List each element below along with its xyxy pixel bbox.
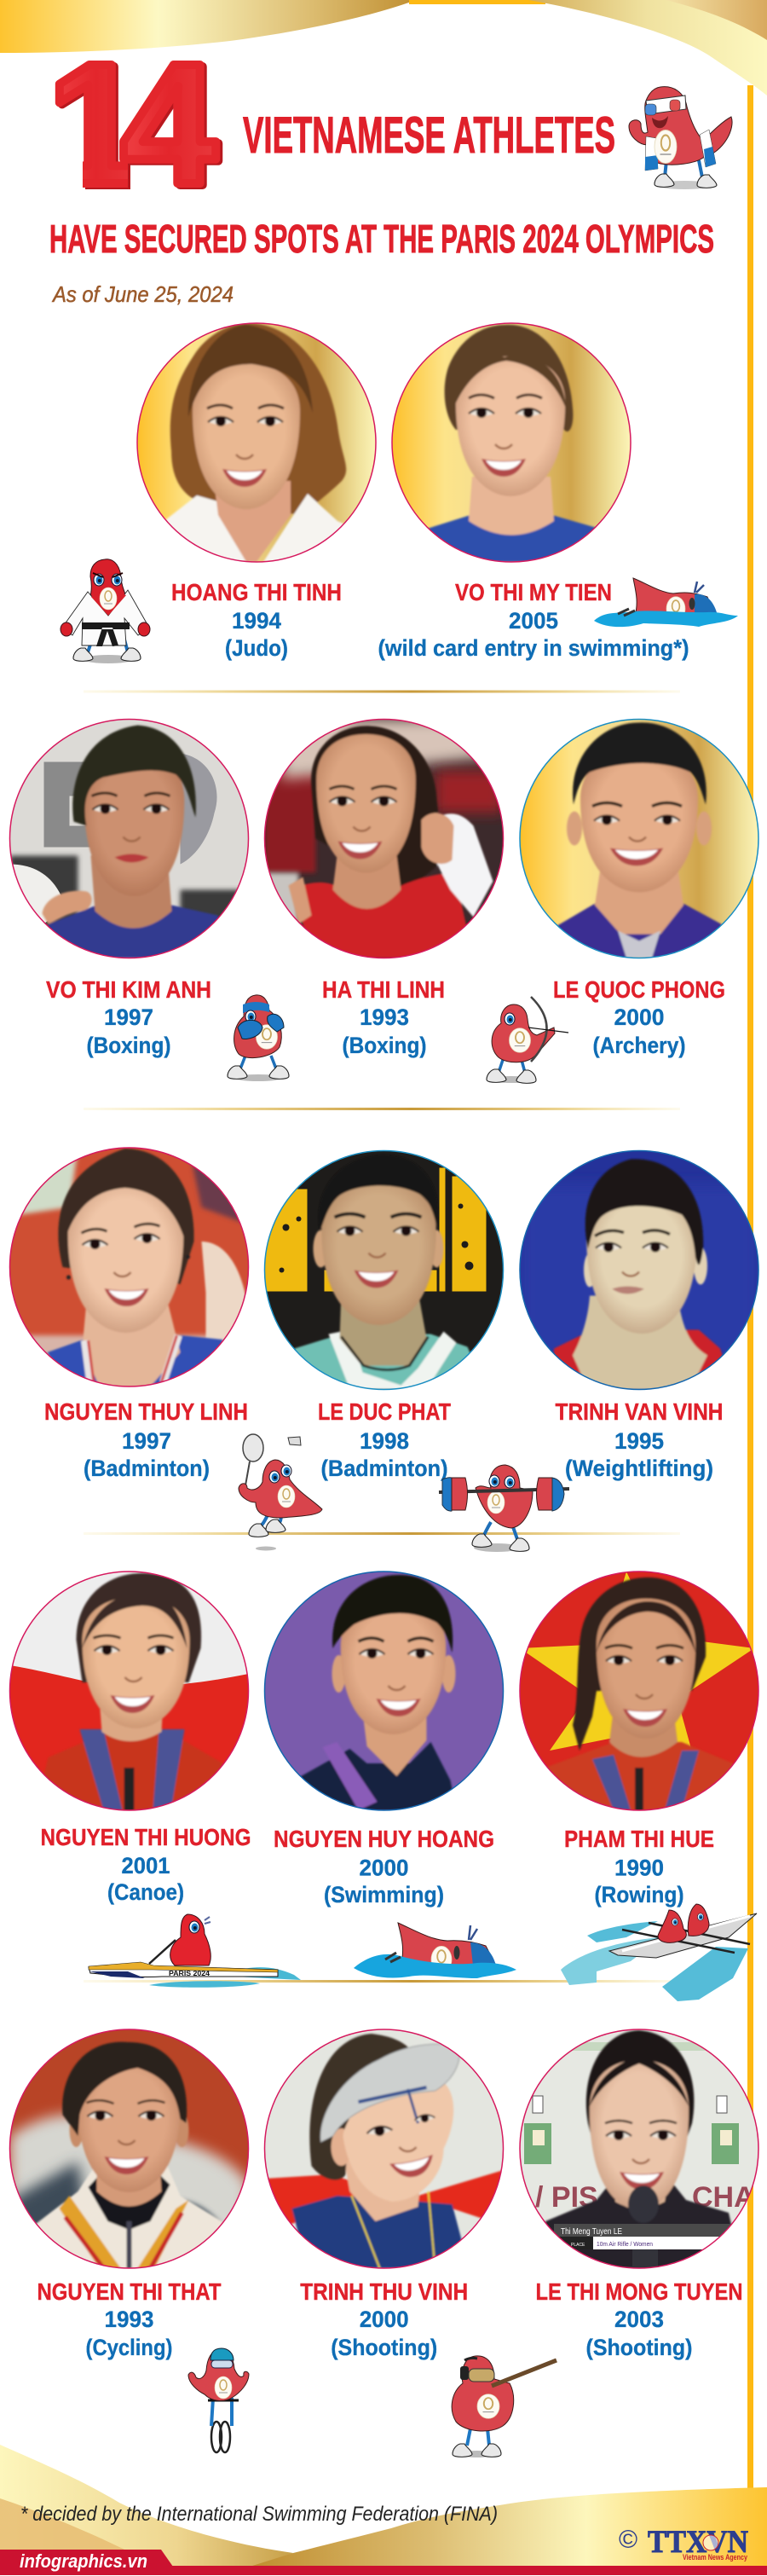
portrait: Hoang Thi Tinh <box>137 323 376 562</box>
right border bar <box>747 85 753 2490</box>
portrait: Le Thi Mong Tuyen: / PIS <box>535 2181 598 2214</box>
background swoosh: bottom <box>0 2445 767 2567</box>
name block: Pham Thi Hue <box>564 1826 714 1907</box>
logo: TTXVN: TTXVN <box>648 2525 748 2560</box>
portrait: Pham Thi Hue <box>520 1572 758 1810</box>
name block: Hoang Thi Tinh: (Judo) <box>225 635 288 661</box>
name block: Ha Thi Linh: 1993 <box>360 1004 409 1030</box>
portrait: Vo Thi Kim Anh <box>10 720 249 958</box>
mascot: badminton <box>239 1434 322 1550</box>
name block: Nguyen Huy Hoang: (Swimming) <box>324 1882 444 1907</box>
name block: Trinh Thu Vinh: (Shooting) <box>331 2335 437 2360</box>
mascot: judo <box>61 559 150 663</box>
name block: Nguyen Thi That: (Cycling) <box>85 2335 172 2360</box>
mascot: swimming (Huy Hoang) <box>354 1923 516 1978</box>
logo: TTXVN <box>619 2525 748 2562</box>
portrait: Le Thi Mong Tuyen <box>520 2029 763 2268</box>
mascot: canoe <box>89 1914 301 1988</box>
name block: Trinh Van Vinh: 1995 <box>614 1428 664 1454</box>
portrait: Le Thi Mong Tuyen: 5 <box>559 2240 563 2248</box>
mascot: cycling <box>188 2348 249 2452</box>
name block: Hoang Thi Tinh <box>171 579 342 661</box>
portrait: Vo Thi My Tien <box>392 323 631 562</box>
date note: As of June 25, 2024 <box>51 281 234 307</box>
name block: Le Quoc Phong <box>553 976 725 1058</box>
name block: Trinh Thu Vinh: 2000 <box>360 2307 409 2332</box>
name block: Ha Thi Linh: (Boxing) <box>343 1033 426 1058</box>
portrait: Trinh Van Vinh <box>520 1151 758 1390</box>
mascot: boxing <box>228 995 289 1081</box>
title number 14: 1 <box>48 27 143 220</box>
portrait: Le Quoc Phong <box>520 720 758 958</box>
name block: Le Quoc Phong: 2000 <box>614 1004 665 1030</box>
name block: Vo Thi My Tien: (wild card entry in swimming*) <box>378 635 689 661</box>
name block: Hoang Thi Tinh: HOANG THI TINH <box>171 579 342 605</box>
name block: Nguyen Thi Huong <box>41 1824 251 1905</box>
portrait: Le Thi Mong Tuyen: Thi Meng Tuyen LE <box>561 2226 622 2237</box>
mascot: archery <box>487 997 568 1083</box>
footer bar with site tab <box>0 2550 767 2575</box>
title number 14: 4 <box>121 27 216 220</box>
name block: Pham Thi Hue: PHAM THI HUE <box>564 1826 714 1852</box>
mascot: canoe: PARIS 2024 <box>169 1970 210 1977</box>
name block: Nguyen Thi That: 1993 <box>104 2307 153 2332</box>
name block: Vo Thi My Tien: VO THI MY TIEN <box>455 579 612 605</box>
name block: Ha Thi Linh: HA THI LINH <box>322 976 445 1003</box>
name block: Le Quoc Phong: LE QUOC PHONG <box>553 976 725 1003</box>
name block: Trinh Van Vinh <box>556 1398 723 1481</box>
name block: Vo Thi Kim Anh: VO THI KIM ANH <box>46 976 211 1003</box>
name block: Pham Thi Hue: (Rowing) <box>595 1882 683 1907</box>
portrait: Le Duc Phat <box>264 1151 503 1390</box>
portrait: Nguyen Huy Hoang <box>264 1572 503 1810</box>
name block: Le Thi Mong Tuyen: 2003 <box>614 2307 664 2332</box>
portrait: Trinh Thu Vinh <box>264 2029 503 2268</box>
name block: Nguyen Thuy Linh <box>44 1398 248 1481</box>
name block: Pham Thi Hue: 1990 <box>614 1855 664 1881</box>
portrait: Ha Thi Linh <box>264 720 503 958</box>
background swoosh: top <box>0 0 767 96</box>
name block: Le Thi Mong Tuyen: (Shooting) <box>586 2335 692 2360</box>
name block: Le Quoc Phong: (Archery) <box>593 1033 685 1058</box>
footer bar with site tab: infographics.vn <box>20 2550 147 2572</box>
mascot: cheering with glasses <box>629 87 732 189</box>
name block: Le Duc Phat: LE DUC PHAT <box>318 1398 451 1425</box>
name block: Trinh Van Vinh: TRINH VAN VINH <box>556 1398 723 1425</box>
name block: Ha Thi Linh <box>322 976 445 1058</box>
portrait: Le Thi Mong Tuyen: CHAI <box>692 2181 763 2214</box>
portrait: Le Thi Mong Tuyen: PLACE <box>571 2243 585 2248</box>
name block: Trinh Thu Vinh <box>300 2278 468 2360</box>
name block: Vo Thi Kim Anh <box>46 976 211 1058</box>
logo: TTXVN: © <box>619 2526 637 2554</box>
name block: Nguyen Huy Hoang: NGUYEN HUY HOANG <box>274 1826 494 1852</box>
name block: Nguyen Thi Huong: NGUYEN THI HUONG <box>41 1824 251 1850</box>
name block: Nguyen Thi Huong: 2001 <box>121 1853 170 1878</box>
name block: Trinh Thu Vinh: TRINH THU VINH <box>300 2278 468 2305</box>
name block: Nguyen Huy Hoang <box>274 1826 494 1907</box>
name block: Nguyen Huy Hoang: 2000 <box>360 1855 409 1881</box>
portrait: Nguyen Thuy Linh <box>10 1148 249 1386</box>
name block: Nguyen Thi That <box>37 2278 222 2360</box>
name block: Vo Thi My Tien <box>378 579 689 661</box>
name block: Le Thi Mong Tuyen <box>535 2278 743 2360</box>
name block: Vo Thi My Tien: 2005 <box>509 608 558 634</box>
name block: Nguyen Thuy Linh: (Badminton) <box>84 1456 210 1481</box>
name block: Vo Thi Kim Anh: (Boxing) <box>87 1033 170 1058</box>
name block: Nguyen Thi That: NGUYEN THI THAT <box>37 2278 222 2305</box>
name block: Le Duc Phat: 1998 <box>360 1428 409 1454</box>
name block: Vo Thi Kim Anh: 1997 <box>104 1004 153 1030</box>
name block: Le Duc Phat: (Badminton) <box>320 1456 448 1481</box>
portrait: Le Thi Mong Tuyen: 10m Air Rifle / Women <box>597 2240 653 2248</box>
name block: Le Duc Phat <box>318 1398 451 1481</box>
name block: Nguyen Thuy Linh: NGUYEN THUY LINH <box>44 1398 248 1425</box>
portrait: Nguyen Thi Huong <box>10 1572 249 1810</box>
mascot: swimming <box>594 578 738 627</box>
name block: Trinh Van Vinh: (Weightlifting) <box>565 1456 713 1481</box>
name block: Nguyen Thuy Linh: 1997 <box>122 1428 171 1454</box>
mascot: rowing <box>561 1904 757 2001</box>
name block: Hoang Thi Tinh: 1994 <box>232 608 281 634</box>
mascot: weightlifting <box>439 1465 569 1552</box>
portrait: Nguyen Thi That <box>10 2029 249 2268</box>
name block: Nguyen Thi Huong: (Canoe) <box>107 1879 184 1905</box>
footnote: * decided by the International Swimming Federation (FINA) <box>20 2503 498 2526</box>
logo: TTXVN: Vietnam News Agency <box>683 2553 747 2562</box>
mascot: shooting <box>452 2356 557 2457</box>
title number 14 <box>55 61 223 189</box>
